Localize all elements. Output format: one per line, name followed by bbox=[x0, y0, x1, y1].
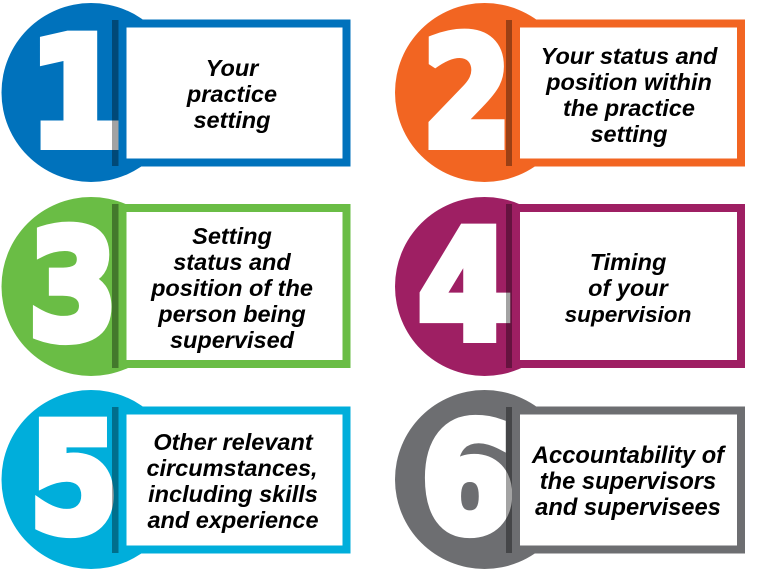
text box 2 bbox=[516, 24, 741, 162]
label 2: position within bbox=[545, 69, 712, 95]
divider band 2 bbox=[506, 20, 512, 166]
digit 6: 6 bbox=[421, 392, 515, 567]
panel 1: your practice setting bbox=[2, 3, 346, 182]
label 2: the practice bbox=[563, 95, 695, 121]
label 5: and experience bbox=[147, 507, 319, 533]
label 1: practice bbox=[186, 81, 277, 107]
divider band 6 bbox=[506, 407, 512, 553]
number circle 1 bbox=[2, 3, 180, 182]
label 2: Your status and bbox=[541, 43, 718, 69]
label 3: position of the bbox=[150, 275, 313, 301]
label 6 bbox=[531, 443, 726, 521]
divider band 1 bbox=[112, 20, 119, 166]
label 4 bbox=[565, 249, 691, 327]
label 4: of your bbox=[588, 275, 670, 301]
text box 3 bbox=[122, 208, 346, 364]
digit 4: 4 bbox=[418, 199, 512, 374]
panel 5: other circumstances bbox=[2, 390, 346, 569]
label 2: setting bbox=[590, 121, 668, 147]
label 1 bbox=[186, 55, 277, 133]
label 5 bbox=[146, 429, 319, 533]
label 6: and supervisees bbox=[535, 495, 721, 521]
label 3: status and bbox=[173, 249, 291, 275]
panel 2: status and position bbox=[395, 3, 741, 182]
number circle 5 bbox=[2, 390, 180, 569]
label 5: including skills bbox=[148, 481, 318, 507]
panel 6: accountability bbox=[395, 390, 741, 569]
label 4: supervision bbox=[565, 302, 691, 327]
label 6: Accountability of bbox=[531, 443, 726, 469]
text box 6 bbox=[516, 410, 741, 550]
label 4: Timing bbox=[590, 249, 666, 275]
divider band 3 bbox=[112, 204, 119, 368]
label 3: Setting bbox=[192, 223, 272, 249]
label 6: the supervisors bbox=[540, 469, 716, 495]
divider band 5 bbox=[112, 407, 119, 553]
label 5: Other relevant bbox=[153, 429, 314, 455]
number circle 4 bbox=[395, 197, 574, 376]
digit 3: 3 bbox=[29, 199, 117, 374]
text box 5 bbox=[122, 410, 346, 550]
text box 1 bbox=[122, 24, 346, 162]
label 1: setting bbox=[193, 107, 271, 133]
number circle 3 bbox=[2, 197, 180, 376]
panel 4: timing bbox=[395, 197, 741, 376]
label 2 bbox=[541, 43, 718, 147]
panel 3: person being supervised bbox=[2, 197, 346, 376]
digit 1: 1 bbox=[29, 6, 125, 180]
number circle 6 bbox=[395, 390, 574, 569]
label 3: supervised bbox=[170, 327, 295, 353]
label 1: Your bbox=[206, 55, 260, 81]
label 5: circumstances, bbox=[146, 455, 318, 481]
digit 2: 2 bbox=[423, 6, 511, 181]
label 3: person being bbox=[157, 301, 306, 327]
label 3 bbox=[150, 223, 313, 353]
number circle 2 bbox=[395, 3, 574, 182]
divider band 4 bbox=[506, 204, 512, 368]
text box 4 bbox=[516, 208, 741, 364]
digit 5: 5 bbox=[30, 392, 118, 567]
